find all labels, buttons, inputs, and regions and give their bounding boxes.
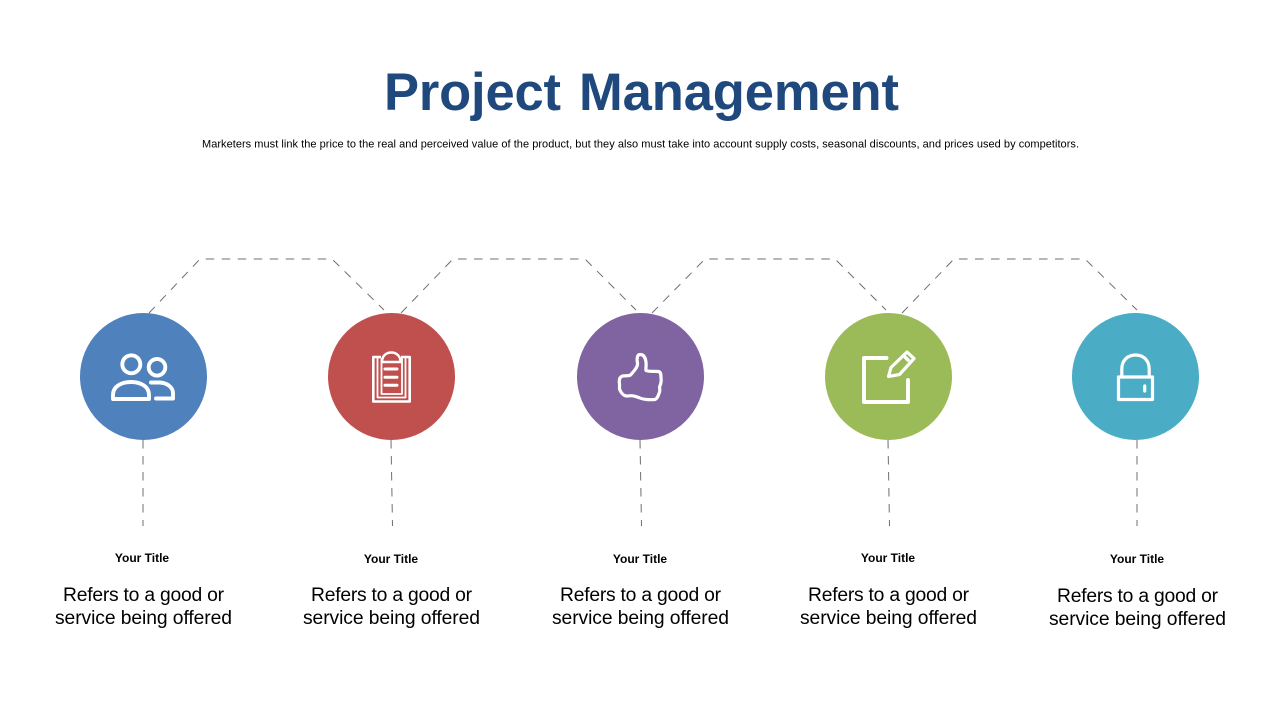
connector: step 4 to step 5 xyxy=(902,259,1137,313)
circle: blue xyxy=(80,313,207,440)
connector: step 3 to step 4 xyxy=(652,259,886,313)
dashed line down xyxy=(888,440,890,526)
description: service being offered xyxy=(55,608,232,629)
heading: Your Title xyxy=(861,551,915,565)
dashed line down xyxy=(142,440,144,526)
dashed line down xyxy=(640,440,642,526)
description: Refers to a good or xyxy=(63,585,225,606)
panel: step 2 xyxy=(303,313,480,629)
description: service being offered xyxy=(552,608,729,629)
subtitle text: Marketers must link the price to the real and perceived value of the product, but they also must take into account supply costs, seasonal discounts, and prices used by competitors. xyxy=(202,138,1079,150)
connector: step 1 to step 2 xyxy=(149,259,384,313)
dashed line down xyxy=(391,440,392,526)
icon: thumbs up xyxy=(619,354,661,400)
title: Management xyxy=(579,63,899,122)
description: Refers to a good or xyxy=(311,585,473,606)
heading: Your Title xyxy=(364,552,418,566)
description: Refers to a good or xyxy=(808,585,970,606)
icon: padlock xyxy=(1118,355,1152,400)
icon: people xyxy=(113,355,173,399)
panel: step 5 xyxy=(1049,313,1226,630)
description: service being offered xyxy=(1049,609,1226,630)
heading: Your Title xyxy=(613,552,667,566)
circle: purple xyxy=(577,313,704,440)
description: service being offered xyxy=(303,608,480,629)
description: service being offered xyxy=(800,608,977,629)
heading: Your Title xyxy=(115,551,169,565)
heading: Your Title xyxy=(1110,552,1164,566)
description: Refers to a good or xyxy=(1057,586,1219,607)
panel: step 1 xyxy=(55,313,232,629)
panel: step 4 xyxy=(800,313,977,629)
icon: clipboard xyxy=(373,352,410,402)
circle: teal xyxy=(1072,313,1199,440)
connector: step 2 to step 3 xyxy=(401,259,636,313)
circle: green xyxy=(825,313,952,440)
description: Refers to a good or xyxy=(560,585,722,606)
title: Project xyxy=(384,63,561,122)
icon: edit note xyxy=(864,352,914,402)
panel: step 3 xyxy=(552,313,729,629)
dashed line down xyxy=(1136,440,1138,526)
circle: red xyxy=(328,313,455,440)
